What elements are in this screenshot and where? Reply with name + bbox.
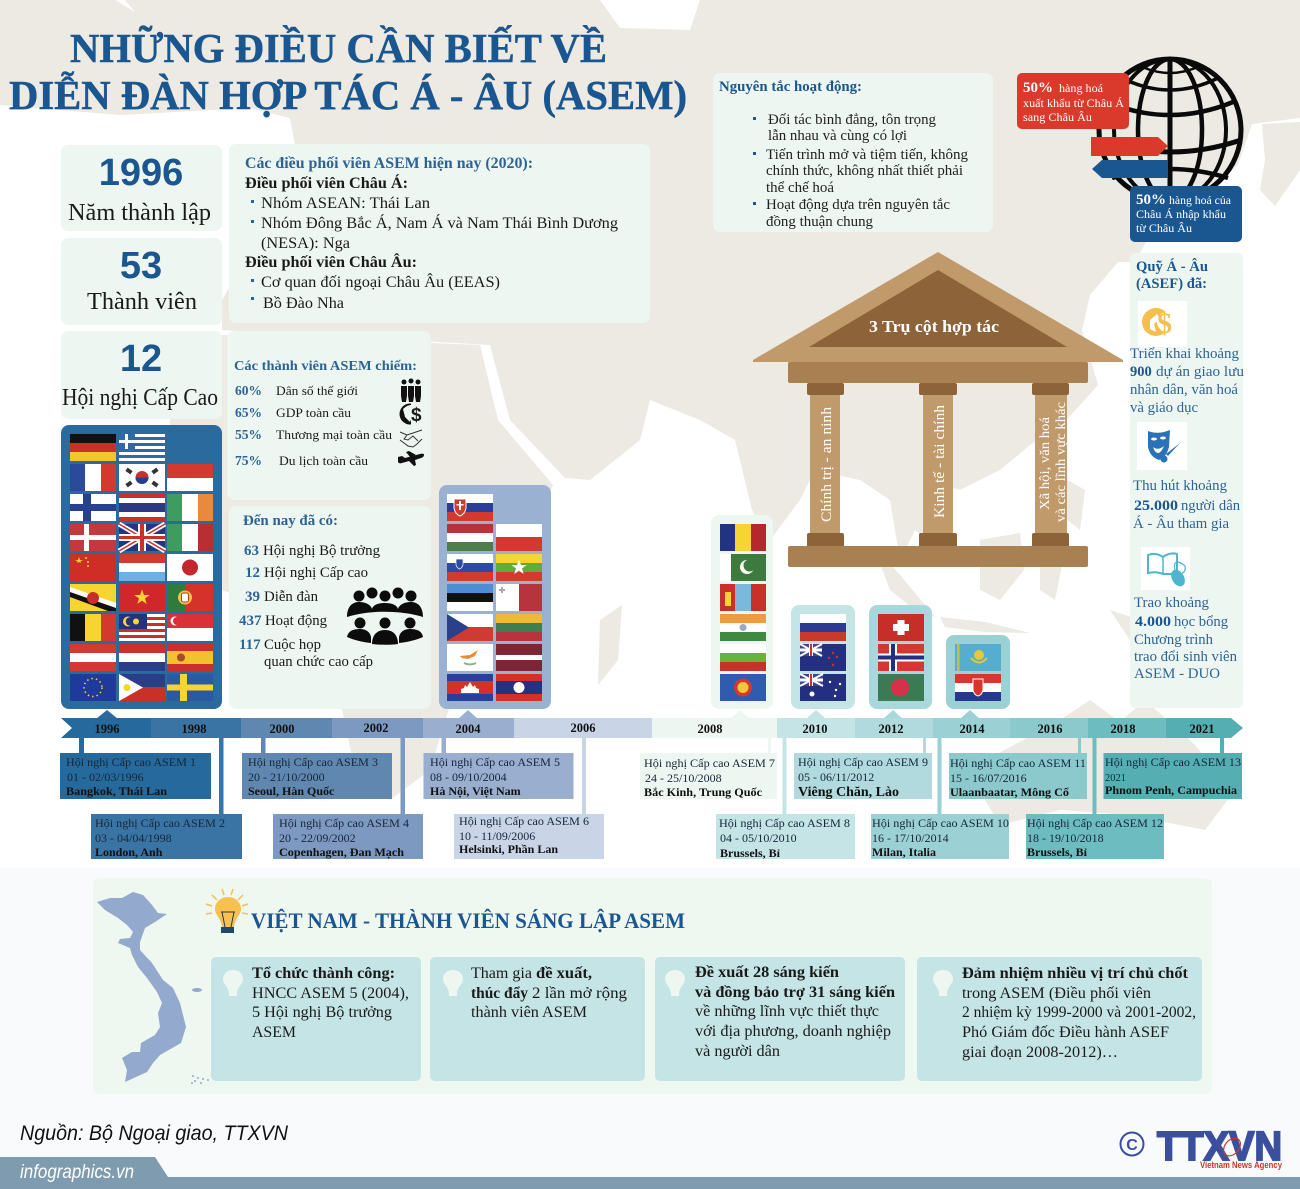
callout: export: 50%: [1023, 80, 1053, 96]
summit 9: Hội nghị Cấp cao ASEM 9: [798, 755, 928, 769]
background world map: [0, 0, 1300, 830]
summit 11: Ulaanbaatar, Mông Cổ: [950, 785, 1069, 799]
timeline: 2014: [960, 722, 985, 736]
panel: coordinators: (NESA): Nga: [261, 235, 350, 252]
summit 10: Hội nghị Cấp cao ASEM 10: [872, 816, 1009, 830]
flags slovenia myanmar: [447, 554, 542, 581]
panel: member share: Thương mại toàn cầu: [276, 427, 393, 442]
panel: achievements so far: 39: [245, 589, 260, 605]
icon: globe dollar orange: [1138, 301, 1187, 347]
footer bar: [0, 1157, 1300, 1189]
callout: import: từ Châu Âu: [1136, 221, 1192, 235]
icon: light bulb: [206, 889, 248, 933]
summit 11: Hội nghị Cấp cao ASEM 11: [950, 756, 1086, 770]
card: proposing: 2 lần mở rộng: [532, 985, 627, 1002]
panel: ASEF: học bổng: [1174, 614, 1228, 630]
summit 12: Hội nghị Cấp cao ASEM 12: [1027, 816, 1163, 830]
flags row 9: [70, 674, 213, 701]
summit 1: Hội nghị Cấp cao ASEM 1: [66, 755, 196, 769]
panel: ASEF: [1130, 253, 1244, 708]
summit 7: Hội nghị Cấp cao ASEM 7: [644, 756, 775, 770]
panel: coordinators: Bồ Đào Nha: [263, 295, 344, 312]
summit 9: 05 - 06/11/2012: [798, 770, 874, 784]
timeline: 2010: [802, 722, 828, 736]
panel: achievements so far: 12: [245, 565, 260, 581]
panel: achievements so far: 63: [244, 543, 259, 559]
panel: principles: [713, 73, 993, 232]
timeline: 1996: [94, 722, 120, 736]
card: hosting: [211, 957, 421, 1081]
icon: people: [401, 378, 421, 402]
summit 13: 2021: [1105, 773, 1126, 784]
panel: achievements so far: Hội nghị Cấp cao: [264, 565, 368, 581]
callout: import: [1130, 186, 1242, 242]
summit 9: Viêng Chăn, Lào: [798, 785, 899, 800]
icon: handshake: [400, 430, 422, 447]
summit 3: 20 - 21/10/2000: [248, 770, 325, 784]
temple: three pillars: và các lĩnh vực khác: [1053, 402, 1068, 522]
flags slovakia: [447, 494, 493, 521]
summit 9: [794, 738, 932, 800]
panel: principles: lẫn nhau và cùng có lợi: [768, 128, 907, 144]
summit 7: Bắc Kinh, Trung Quốc: [644, 785, 763, 799]
summit 4: Copenhagen, Đan Mạch: [279, 845, 404, 859]
card: proposing: đề xuất,: [536, 965, 592, 982]
card: initiatives: và đồng bảo trợ 31 sáng kiến: [695, 984, 895, 1001]
panel: achievements so far: 117: [239, 637, 261, 653]
arrow: export red: [1091, 137, 1168, 156]
panel: principles: Tiến trình mở và tiệm tiến, không: [766, 147, 968, 163]
icon: book and mouse: [1141, 547, 1190, 590]
panel: ASEF: Chương trình: [1134, 632, 1214, 648]
summit 3: Hội nghị Cấp cao ASEM 3: [248, 755, 378, 769]
icon: globe dollar: $: [411, 405, 422, 426]
card: hosting: HNCC ASEM 5 (2004),: [252, 985, 409, 1002]
panel: ASEF: dự án giao lưu: [1156, 364, 1244, 380]
summit 8: 04 - 05/10/2010: [720, 831, 797, 845]
summit 5: [424, 738, 574, 799]
summit 13: Hội nghị Cấp cao ASEM 13: [1105, 755, 1241, 769]
summit 13: [1104, 738, 1242, 799]
icon: plane: [398, 451, 424, 466]
panel: achievements so far: Diễn đàn: [264, 589, 318, 605]
summit 2: Hội nghị Cấp cao ASEM 2: [95, 816, 225, 830]
panel: ASEF: Quỹ Á - Âu: [1136, 258, 1208, 275]
panel: principles: Đối tác bình đẳng, tôn trọng: [768, 112, 936, 128]
panel: 1996 flags: [61, 425, 222, 719]
panel: ASEF: người dân: [1181, 498, 1241, 514]
summit 2: London, Anh: [95, 845, 163, 859]
temple: three pillars: Xã hội, văn hoá: [1037, 417, 1052, 510]
summit 5: Hội nghị Cấp cao ASEM 5: [430, 755, 560, 769]
summit 6: 10 - 11/09/2006: [459, 829, 535, 843]
flags hungary poland: [447, 524, 542, 551]
summit 1: Bangkok, Thái Lan: [66, 784, 167, 798]
card: hosting: 5 Hội nghị Bộ trưởng: [252, 1004, 392, 1021]
flags cambodia laos: [447, 674, 542, 701]
card: initiatives: và người dân: [695, 1043, 780, 1060]
timeline: 2016: [1038, 722, 1062, 736]
card: key positions: 2 nhiệm kỳ 1999-2000 và 2001-2002,: [962, 1004, 1196, 1021]
card: proposing: [430, 957, 645, 1081]
panel: founding year: Năm thành lập: [68, 200, 211, 226]
panel: members: 53: [120, 245, 162, 287]
panel: 2008 flags: [711, 515, 773, 719]
summit 3: Seoul, Hàn Quốc: [248, 784, 335, 798]
timeline: 2012: [878, 722, 904, 736]
summit 6: [454, 738, 604, 859]
summit 12: 18 - 19/10/2018: [1027, 831, 1104, 845]
panel: founding year: [61, 145, 222, 231]
summit 4: [273, 738, 423, 859]
panel: summits: 12: [120, 338, 162, 380]
summit 1: [60, 738, 211, 799]
summit 11: [949, 738, 1087, 799]
panel: member share: 60%: [235, 383, 262, 398]
panel: summits: Hội nghị Cấp Cao: [62, 385, 218, 411]
summit 4: Hội nghị Cấp cao ASEM 4: [279, 816, 409, 830]
source: Nguồn: Bộ Ngoại giao, TTXVN: [20, 1122, 289, 1145]
card: proposing: thành viên ASEM: [471, 1004, 587, 1021]
panel: principles: đồng thuận chung: [766, 214, 873, 230]
flags row 2: [70, 464, 213, 491]
timeline: 2008: [698, 722, 722, 736]
panel: ASEF: (ASEF) đã:: [1136, 276, 1207, 292]
card: hosting: ASEM: [252, 1024, 296, 1041]
timeline: 2002: [364, 721, 388, 735]
flags row 5: [70, 554, 213, 581]
panel: ASEF: 25.000: [1134, 498, 1178, 514]
arrow: import blue: [1092, 160, 1168, 178]
summit 2: [91, 738, 242, 859]
panel: ASEF: ASEM - DUO: [1134, 666, 1220, 682]
callout: import: hàng hoá của: [1169, 193, 1232, 207]
panel: achievements so far: Hoạt động: [265, 613, 327, 629]
flags estonia malta: [447, 584, 542, 611]
panel: ASEF: nhân dân, văn hoá: [1130, 382, 1239, 398]
panel: ASEF: Thu hút khoảng: [1133, 478, 1227, 494]
flags czech lithuania: [447, 614, 542, 641]
summit 8: [716, 738, 855, 860]
title: NHỮNG ĐIỀU CẦN BIẾT VỀ: [70, 25, 607, 71]
callout: export: sang Châu Âu: [1023, 110, 1092, 124]
panel: member share: Các thành viên ASEM chiếm:: [234, 359, 417, 374]
summit 8: Brussels, Bỉ: [720, 846, 781, 860]
timeline: [61, 718, 1243, 738]
card: initiatives: với địa phương, doanh nghiệp: [695, 1023, 891, 1040]
panel: ASEF: 4.000: [1135, 614, 1171, 630]
panel: member share: 55%: [235, 427, 262, 442]
panel: achievements so far: [229, 506, 431, 709]
flags cyprus latvia: [447, 644, 542, 671]
panel: principles: Nguyên tắc hoạt động:: [719, 79, 862, 95]
card: proposing: thúc đẩy: [471, 985, 528, 1002]
panel: members: [61, 238, 222, 325]
panel: coordinators: Nhóm Đông Bắc Á, Nam Á và Nam Thái Bình Dương: [261, 213, 618, 232]
panel: coordinators: Các điều phối viên ASEM hiện nay (2020):: [245, 155, 533, 172]
summit 7: 24 - 25/10/2008: [645, 771, 722, 785]
flags row 6: [70, 584, 213, 611]
icon: globe dollar orange: $: [1157, 307, 1172, 340]
summit 5: Hà Nội, Việt Nam: [430, 784, 521, 798]
callout: export: xuất khẩu từ Châu Á: [1023, 96, 1124, 110]
panel: member share: Dân số thế giới: [276, 383, 358, 398]
icon: globe: [1099, 59, 1241, 202]
panel: ASEF: 900: [1130, 364, 1152, 380]
temple: three pillars: 3 Trụ cột hợp tác: [869, 317, 999, 336]
summit 12: Brussels, Bỉ: [1027, 845, 1088, 859]
logo TTXVN: TTXVN: [1157, 1123, 1282, 1169]
flags row 8: [70, 644, 213, 671]
card: proposing: Tham gia: [471, 965, 532, 982]
panel: ASEF: trao đổi sinh viên: [1134, 649, 1238, 665]
summit 4: 20 - 22/09/2002: [279, 831, 356, 845]
summit 10: 16 - 17/10/2014: [872, 831, 949, 845]
panel: member share: GDP toàn cầu: [276, 405, 352, 420]
panel: achievements so far: Hội nghị Bộ trưởng: [263, 543, 380, 559]
logo TTXVN: Vietnam News Agency: [1200, 1160, 1283, 1171]
summit 7: [640, 738, 777, 799]
timeline: 2000: [270, 722, 294, 736]
temple: three pillars: [753, 252, 1123, 567]
panel: principles: Hoạt động dựa trên nguyên tắc: [766, 197, 950, 213]
footer bar: infographics.vn: [20, 1162, 134, 1183]
card: key positions: giai đoạn 2008-2012)…: [962, 1044, 1118, 1061]
summit 6: Helsinki, Phần Lan: [459, 842, 558, 856]
callout: import: 50%: [1136, 192, 1166, 208]
summit 12: [1026, 738, 1164, 859]
logo TTXVN: C: [1126, 1137, 1138, 1154]
summit 13: Phnom Penh, Campuchia: [1105, 783, 1237, 797]
temple: three pillars: Chính trị - an ninh: [819, 406, 835, 522]
callout: import: Châu Á nhập khẩu: [1136, 207, 1226, 221]
panel: member share: Du lịch toàn cầu: [279, 453, 369, 468]
summit 10: Milan, Italia: [872, 845, 936, 859]
timeline: 2006: [570, 721, 596, 735]
panel: achievements so far: 437: [239, 613, 262, 629]
panel: achievements so far: quan chức cao cấp: [264, 654, 373, 670]
card: initiatives: Đề xuất 28 sáng kiến: [695, 964, 839, 981]
summit 2: 03 - 04/04/1998: [95, 831, 172, 845]
timeline: 1998: [182, 722, 206, 736]
panel: ASEF: và giáo dục: [1130, 400, 1198, 416]
panel: Vietnam founding member: [93, 878, 1212, 1094]
summit 3: [242, 738, 392, 799]
summit 8: Hội nghị Cấp cao ASEM 8: [719, 816, 850, 830]
icon: globe dollar: [400, 403, 424, 426]
card: hosting: Tổ chức thành công:: [252, 965, 395, 982]
panel: achievements so far: Cuộc họp: [264, 637, 321, 653]
card: key positions: Phó Giám đốc Điều hành ASEF: [962, 1024, 1169, 1041]
card: key positions: [917, 957, 1202, 1081]
summit 1: 01 - 02/03/1996: [67, 770, 144, 784]
title: DIỄN ĐÀN HỢP TÁC Á - ÂU (ASEM): [9, 72, 687, 118]
card: initiatives: [655, 957, 905, 1081]
title: [9, 25, 687, 118]
panel: summits: [61, 331, 222, 419]
panel: member share: 75%: [235, 453, 262, 468]
panel: 2014 flags: [946, 635, 1010, 719]
flags row 1: [70, 434, 165, 461]
panel: member share: 65%: [235, 405, 262, 420]
summit 5: 08 - 09/10/2004: [430, 770, 507, 784]
panel: coordinators: Cơ quan đối ngoại Châu Âu (EEAS): [261, 272, 500, 291]
panel: 2012 flags: [869, 605, 932, 719]
map of Vietnam: [97, 892, 209, 1084]
panel: achievements so far: Đến nay đã có:: [243, 513, 338, 529]
panel: coordinators: Điều phối viên Châu Âu:: [245, 254, 417, 271]
panel: members: Thành viên: [87, 289, 197, 315]
timeline: 2021: [1190, 722, 1214, 736]
icon: mask and brush: [1137, 422, 1187, 470]
timeline: 2018: [1110, 722, 1136, 736]
panel: principles: chính thức, không nhất thiết phải: [766, 163, 963, 179]
card: initiatives: về những lĩnh vực thiết thực: [695, 1003, 879, 1020]
summit 10: [871, 738, 1009, 859]
heading: VIỆT NAM - THÀNH VIÊN SÁNG LẬP ASEM: [251, 908, 685, 933]
summit 11: 15 - 16/07/2016: [950, 771, 1027, 785]
panel: coordinators: [229, 144, 650, 323]
flags row 4: [70, 524, 213, 551]
temple: three pillars: Kinh tế - tài chính: [932, 404, 948, 518]
card: key positions: Đảm nhiệm nhiều vị trí chủ chốt: [962, 965, 1189, 982]
panel: ASEF: Trao khoảng: [1134, 595, 1209, 611]
panel: founding year: 1996: [99, 152, 183, 194]
callout: export: [1017, 73, 1129, 129]
icon: meeting group: [347, 588, 423, 645]
panel: member share: [227, 331, 431, 500]
callout: export: hàng hoá: [1059, 81, 1104, 95]
panel: principles: thể chế hoá: [766, 180, 834, 196]
panel: coordinators: Nhóm ASEAN: Thái Lan: [261, 195, 430, 212]
flags row 3: [70, 494, 213, 521]
flags row 7: [70, 614, 213, 641]
panel: 2010 flags: [791, 605, 855, 719]
timeline: 2004: [456, 722, 481, 736]
summit 6: Hội nghị Cấp cao ASEM 6: [459, 814, 589, 828]
panel: 2004 flags: [439, 485, 551, 719]
panel: ASEF: Á - Âu tham gia: [1133, 515, 1230, 532]
panel: ASEF: Triển khai khoảng: [1130, 346, 1239, 362]
panel: coordinators: Điều phối viên Châu Á:: [245, 175, 408, 192]
card: key positions: trong ASEM (Điều phối viên: [962, 985, 1151, 1002]
